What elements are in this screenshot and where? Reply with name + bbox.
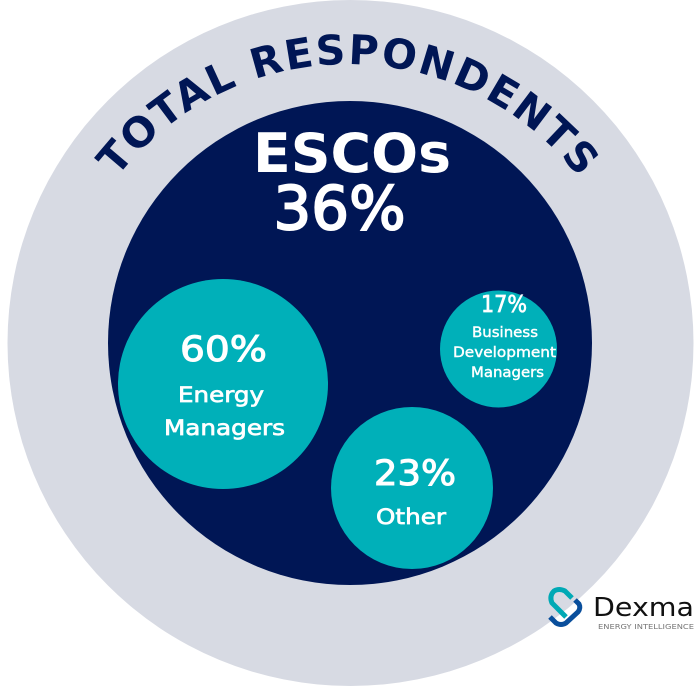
- inner circle: ESCOs: [108, 101, 592, 585]
- icon: Dexma mark: [550, 590, 580, 624]
- bubble: 23% other: Other: [376, 505, 446, 530]
- bubble: 23% other: [331, 407, 493, 569]
- bubble: 17% business development managers: Development: [453, 345, 557, 361]
- logo: Dexma: [550, 590, 694, 631]
- bubble: 60% energy managers: Managers: [164, 416, 285, 441]
- bubble: 17% business development managers: 17%: [481, 292, 527, 318]
- bubble: 60% energy managers: [118, 279, 328, 489]
- bubble: 60% energy managers: 60%: [180, 330, 267, 370]
- curved heading: total respondents: TOTAL RESPONDENTS: [94, 34, 598, 172]
- bubble: 23% other: 23%: [374, 454, 456, 494]
- tagline: ENERGY INTELLIGENCE: [598, 623, 694, 631]
- heading: ESCOs 36%: ESCOs: [253, 122, 451, 185]
- bubble: 60% energy managers: Energy: [178, 383, 264, 408]
- heading: ESCOs 36%: [253, 122, 451, 244]
- wordmark: Dexma: [593, 593, 694, 623]
- bubble: 17% business development managers: Managers: [471, 365, 544, 381]
- bubble: 17% business development managers: [440, 290, 557, 408]
- heading: ESCOs 36%: 36%: [274, 174, 406, 244]
- bubble: 17% business development managers: Business: [472, 325, 538, 341]
